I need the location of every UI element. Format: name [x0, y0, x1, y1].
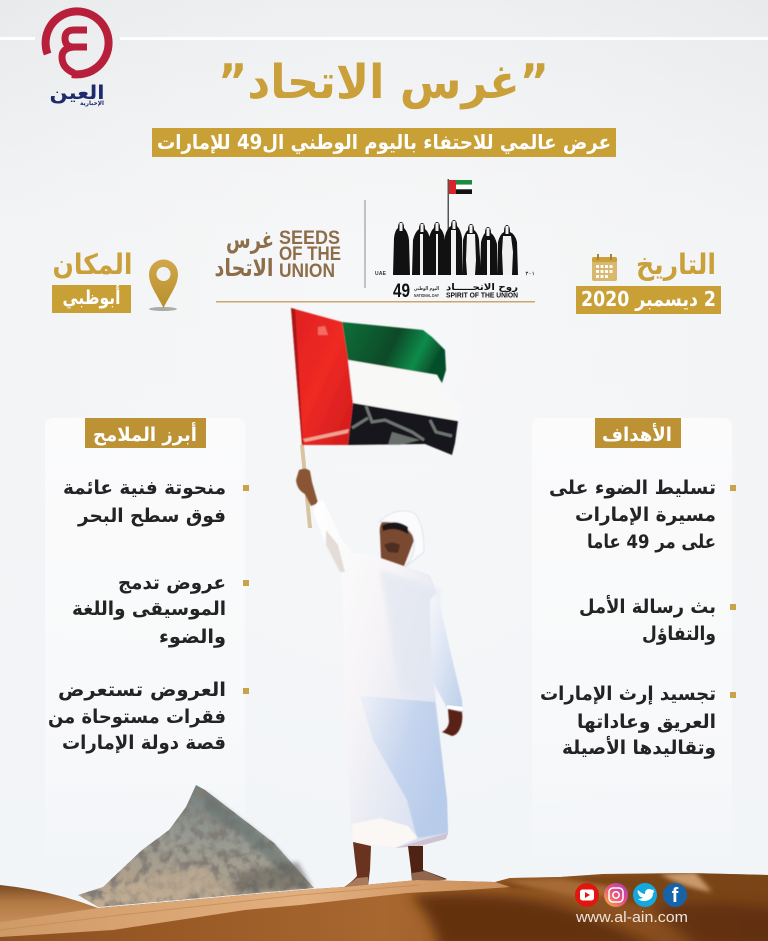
emblem captions: SPIRIT OF THE UNION — [446, 292, 518, 300]
flag pole — [300, 445, 312, 528]
bullet item 3 — [540, 683, 736, 759]
bullet item 3 — [48, 679, 249, 754]
emblem captions: اليوم الوطني — [414, 286, 439, 292]
subtitle banner: عرض عالمي للاحتفاء باليوم الوطني ال49 للإمارات — [157, 130, 611, 155]
location value: أبوظبي — [62, 285, 120, 309]
seeds of the union wordmark: UNION — [279, 261, 335, 282]
UAE flag — [291, 308, 462, 455]
emblem captions: ٣٠١ — [526, 271, 534, 277]
man holding UAE flag — [291, 308, 463, 888]
panel: goals (right) — [532, 418, 736, 883]
seeds of the union wordmark: الاتحاد — [214, 254, 274, 282]
icon: calendar — [592, 254, 617, 281]
bullet item 2: والتفاؤل — [642, 623, 716, 645]
title: ”غرس الاتحاد” — [218, 55, 549, 110]
bullet item 1 — [549, 477, 736, 553]
emblem captions — [375, 271, 534, 302]
location block — [52, 248, 178, 313]
bullet item 3: العريق وعاداتها — [577, 711, 716, 733]
location heading: المكان — [52, 248, 132, 281]
robe sleeve — [430, 593, 463, 712]
emblem captions: روح الاتحـــــاد — [446, 283, 518, 293]
icon: map pin — [149, 260, 178, 311]
raised hand — [296, 469, 318, 506]
panel heading: أبرز الملامح — [93, 422, 197, 446]
logo: Al-Ain News — [46, 11, 109, 107]
icon: facebook: f — [672, 885, 679, 907]
seeds of the union wordmark — [214, 226, 341, 282]
panel heading — [85, 418, 206, 448]
bullet item 1 — [63, 477, 249, 527]
spirit of the union emblem — [216, 179, 535, 302]
date block — [576, 248, 721, 314]
seeds of the union wordmark: غرس — [226, 226, 274, 254]
date heading: التاريخ — [636, 248, 716, 281]
seeds of the union wordmark: OF THE — [279, 244, 341, 265]
bullet item 1: مسيرة الإمارات — [575, 504, 716, 526]
panel heading — [595, 418, 681, 448]
bullet item 3: تجسيد إرث الإمارات — [540, 683, 716, 705]
emblem captions: NATIONAL DAY — [414, 293, 439, 298]
sand mountain — [78, 785, 314, 907]
bullet item 1: منحوتة فنية عائمة — [63, 477, 226, 499]
panel heading: الأهداف — [602, 423, 672, 446]
bullet item 3: وتقاليدها الأصيلة — [562, 736, 716, 759]
bullet item 2: والضوء — [159, 626, 226, 648]
head with keffiyeh — [379, 511, 424, 567]
bullet item 1: فوق سطح البحر — [77, 505, 226, 527]
bullet item 3: فقرات مستوحاة من — [48, 706, 226, 728]
icon: youtube — [575, 883, 599, 907]
bullet item 2: عروض تدمج — [118, 572, 226, 594]
date value: 2 ديسمبر 2020 — [581, 287, 716, 311]
logo: Al-Ain News: الإخبارية — [80, 100, 104, 107]
sand dunes — [0, 870, 768, 941]
social media icons and url — [575, 883, 688, 926]
emblem captions: UAE — [375, 271, 387, 277]
seeds of the union wordmark: SEEDS — [279, 228, 340, 249]
bullet item 2 — [579, 595, 736, 645]
bullet item 1: تسليط الضوء على — [549, 477, 716, 499]
logo: Al-Ain News: العين — [50, 82, 104, 104]
bullet item 3: قصة دولة الإمارات — [62, 732, 226, 754]
emblem captions: 49 — [393, 281, 410, 302]
icon: instagram — [604, 883, 628, 907]
founding figures silhouettes — [393, 220, 518, 275]
far dune — [0, 885, 98, 922]
bullet item 2: الموسيقى واللغة — [72, 598, 226, 620]
panel: highlights (left) — [45, 418, 249, 883]
bullet item 2: بث رسالة الأمل — [579, 595, 716, 618]
robe — [313, 500, 463, 848]
bullet item 2 — [72, 572, 249, 648]
website url: www.al-ain.com — [575, 909, 688, 926]
icon: small flag on pole — [448, 179, 472, 239]
main dune — [0, 870, 768, 941]
icon: twitter — [633, 883, 657, 907]
legs and feet — [343, 842, 447, 888]
bullet item 1: على مر 49 عاما — [587, 531, 716, 553]
bullet item 3: العروض تستعرض — [58, 679, 226, 701]
left hand — [442, 709, 462, 736]
